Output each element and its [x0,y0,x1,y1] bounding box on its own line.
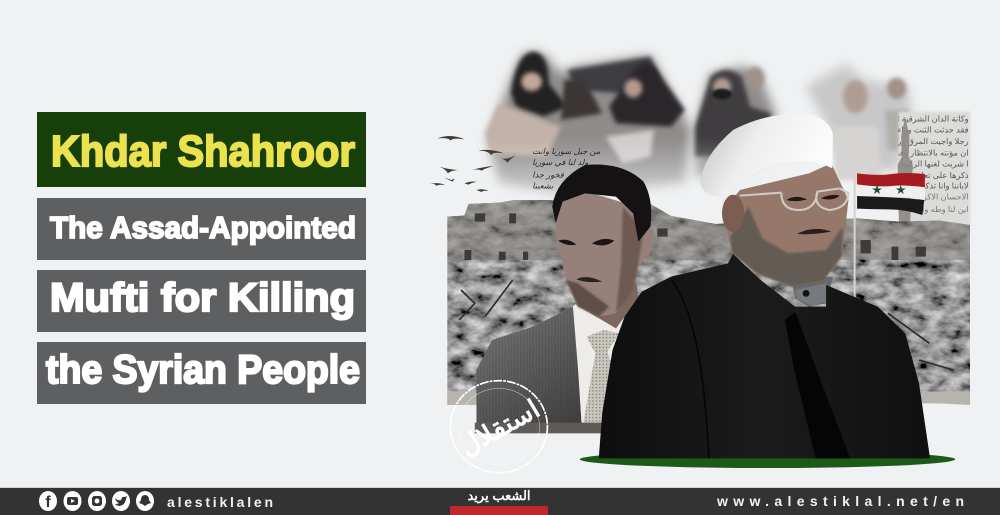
green ground ellipse [580,451,955,468]
refugees crowd [471,52,912,217]
stage band [475,423,604,433]
shirt [573,297,640,423]
tie [583,330,619,423]
face [726,163,848,287]
manuscript panel with minaret: ان مؤنته بالانتظار وفي لنا [883,148,969,157]
ruined city [447,200,970,405]
photo collage [430,52,970,473]
ear [722,195,744,232]
subheading line 2: Mufti for Killing [50,276,355,320]
logo seal: alestiklal: استقلال [454,394,545,462]
social icons [39,491,154,511]
red tab [450,506,548,515]
icon: snapchat [136,491,154,511]
subheading line 1 [37,198,366,260]
title block [37,112,366,404]
portrait: Bashar al-Assad [476,165,654,423]
manuscript panel with minaret [898,111,970,224]
logo seal: alestiklal [450,381,547,473]
subheading line 1: The Assad-Appointed [50,210,356,245]
flag of Syria: ★ [896,185,906,196]
heading: name on green bar [37,112,366,187]
social handle: alestiklalen [167,494,273,510]
manuscript panel with minaret: لاباننا وانا تذكرها [914,182,969,191]
face [555,190,654,317]
icon: instagram [88,491,106,511]
neck [575,283,638,328]
birds [430,136,516,192]
handwritten arabic note: من جبل سوريا وانت [532,147,601,156]
glasses [740,188,848,210]
handwritten arabic note: فخور جدا [532,170,564,179]
flag of Syria: ★ [872,185,882,196]
manuscript panel with minaret: ا شربت لغنها الراسارية لا [883,160,969,169]
manuscript panel with minaret: ذكرها على تعليم علم هذا [885,171,969,180]
manuscript panel with minaret: الاحسان الاكرلا [918,192,969,201]
manuscript panel with minaret: اين لنا وطه وانا [917,205,969,214]
suit [476,307,633,423]
manuscript panel with minaret: فقد حدثت الثنت وراء [897,126,969,135]
black robe [599,254,930,458]
handwritten arabic note [532,147,601,190]
subheading line 3: the Syrian People [46,348,360,392]
hair [552,165,651,242]
footer bar [0,487,1000,515]
beard [730,207,843,287]
manuscript panel with minaret: وكانة الدان الشرقية التي رايتها [866,115,969,124]
portrait: mufti [599,114,930,458]
subheading line 2 [37,270,366,332]
handwritten arabic note: بشعبنا [532,181,554,190]
heading: name on green bar: Khdar Shahroor [51,127,355,176]
neck and collar [792,277,833,307]
handwritten arabic note: ولد لنا في سوريا [532,158,588,167]
icon: facebook: f [45,494,51,511]
icon: twitter [112,491,130,511]
subheading line 3 [37,342,366,404]
turban [700,114,833,207]
icon: youtube [64,491,82,511]
slogan: الشعب يريد [467,488,531,504]
flag of Syria [854,171,925,297]
manuscript panel with minaret: رجلا واجيت المرق ورد [894,137,969,146]
website url: www.alestiklal.net/en [716,493,964,509]
